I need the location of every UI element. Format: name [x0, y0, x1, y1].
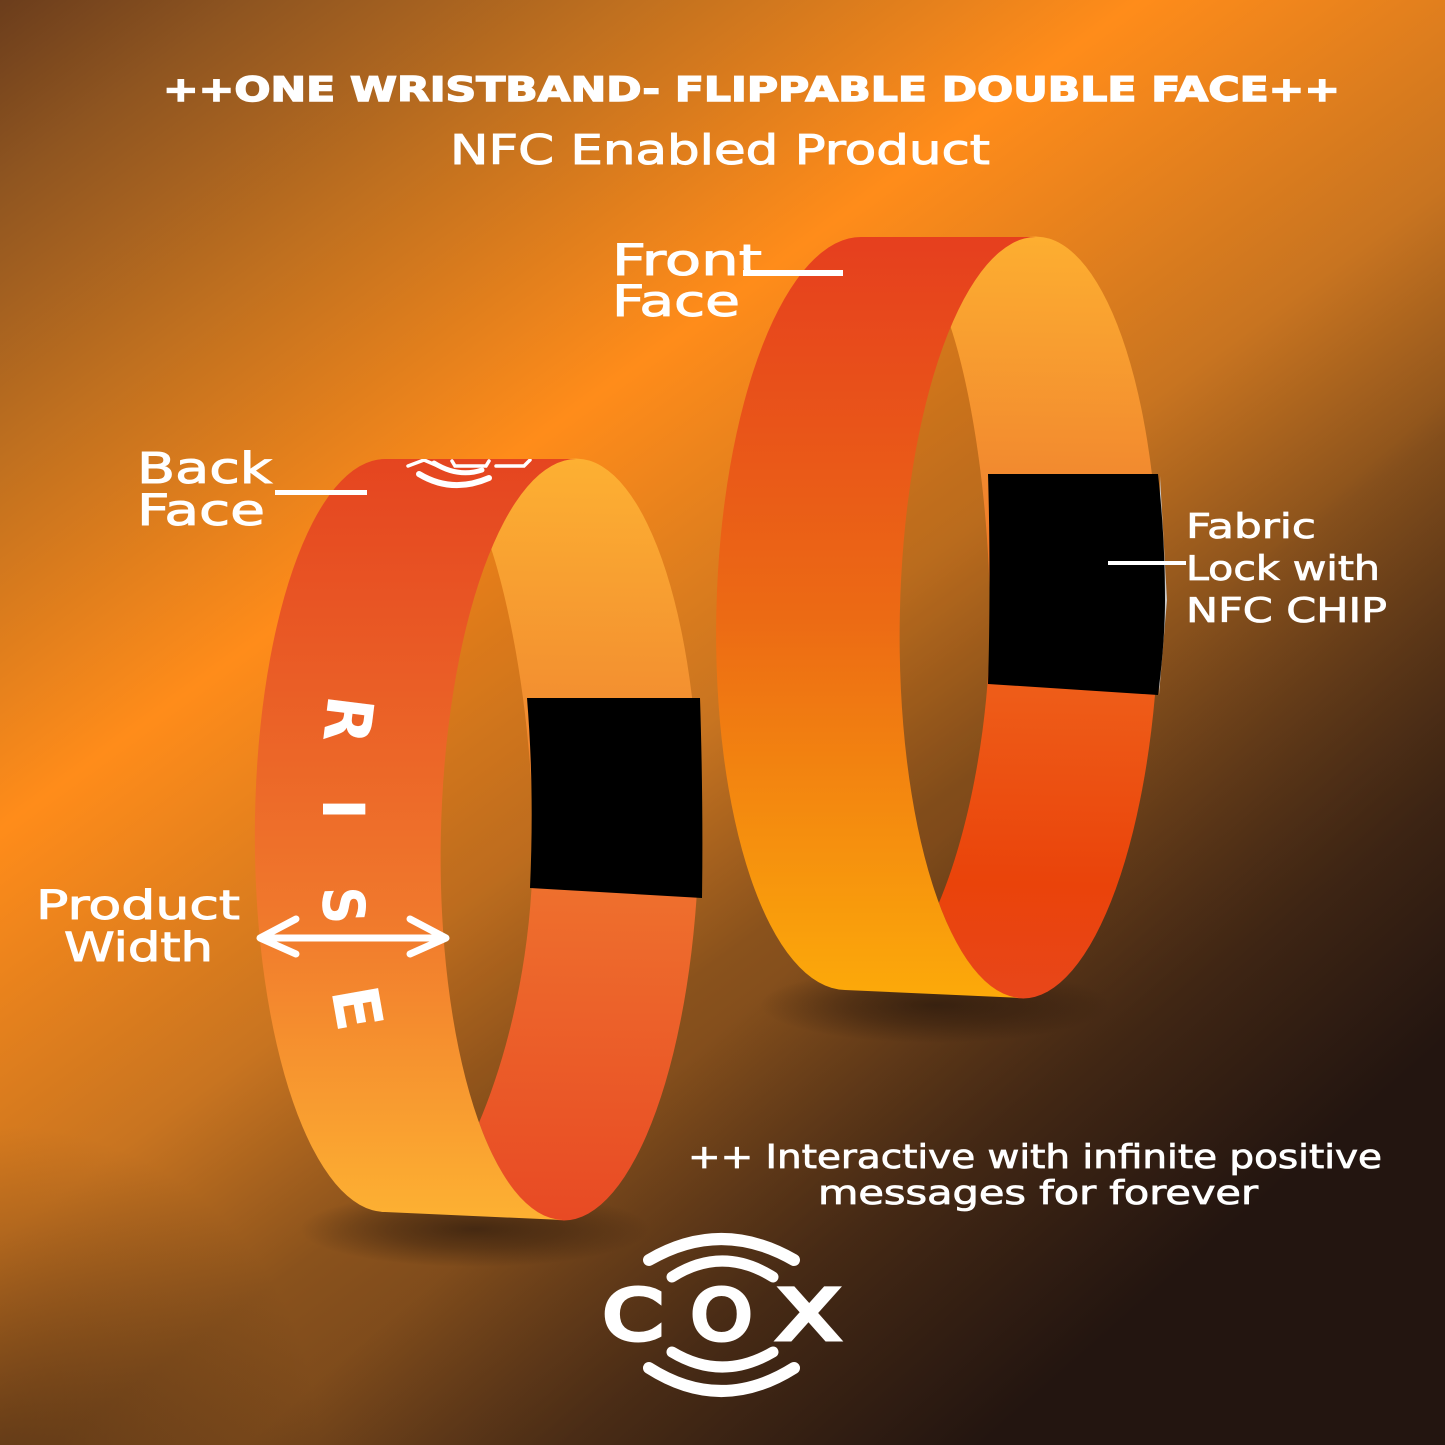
label: product width: [36, 883, 240, 971]
logo wordmark: [603, 1276, 840, 1356]
callout: interactive messages: messages for forever: [818, 1173, 1259, 1212]
band lettering RISE: E: [315, 980, 396, 1036]
band lettering RISE: [308, 692, 396, 1036]
logo wordmark: X: [777, 1276, 840, 1356]
inner surface of right band: [893, 234, 1166, 1001]
label: back face: Back: [137, 444, 272, 494]
logo: COX: [603, 1239, 840, 1391]
label: product width: Product: [36, 883, 240, 929]
shadow under right band: [760, 967, 1110, 1043]
logo wordmark: C: [603, 1276, 663, 1356]
opening of right band: [900, 327, 990, 903]
band lettering RISE: I: [309, 798, 377, 820]
shadow under left band: [300, 1191, 650, 1267]
band lettering RISE: S: [308, 885, 376, 925]
arrow: product width: [260, 919, 446, 954]
inner surface of left band: [434, 456, 706, 1223]
label: back face: Face: [137, 486, 265, 536]
fabric lock with NFC chip (right): [988, 474, 1167, 695]
band lettering RISE: R: [308, 692, 388, 748]
label: front face: Face: [612, 277, 740, 327]
wristband: front face (right): [256, 236, 1167, 1398]
opening of left band: [440, 549, 532, 1122]
fabric lock (left): [527, 698, 702, 898]
label: back face: [137, 444, 367, 536]
wristband: back face (left): [255, 458, 799, 1398]
outer surface of right band: [716, 237, 1037, 998]
logo wordmark: O: [691, 1276, 752, 1356]
clipped COX logo at band top: [408, 460, 530, 485]
subtitle: NFC Enabled Product: [450, 126, 990, 174]
title: ++ONE WRISTBAND- FLIPPABLE DOUBLE FACE++: [163, 70, 1340, 110]
callout: interactive messages: [688, 1137, 1382, 1212]
label: front face: Front: [612, 236, 762, 286]
label: fabric lock with NFC chip: Lock with: [1186, 549, 1380, 589]
label: front face: [612, 236, 843, 327]
label: product width: Width: [64, 925, 213, 971]
outer surface of left band: [255, 459, 577, 1220]
label: fabric lock with NFC chip: NFC CHIP: [1186, 591, 1387, 631]
label: fabric lock with NFC chip: [1108, 507, 1387, 631]
icon: signal arcs: [649, 1239, 794, 1391]
callout: interactive messages: ++ Interactive with infinite positive: [688, 1137, 1382, 1176]
label: fabric lock with NFC chip: Fabric: [1186, 507, 1316, 547]
